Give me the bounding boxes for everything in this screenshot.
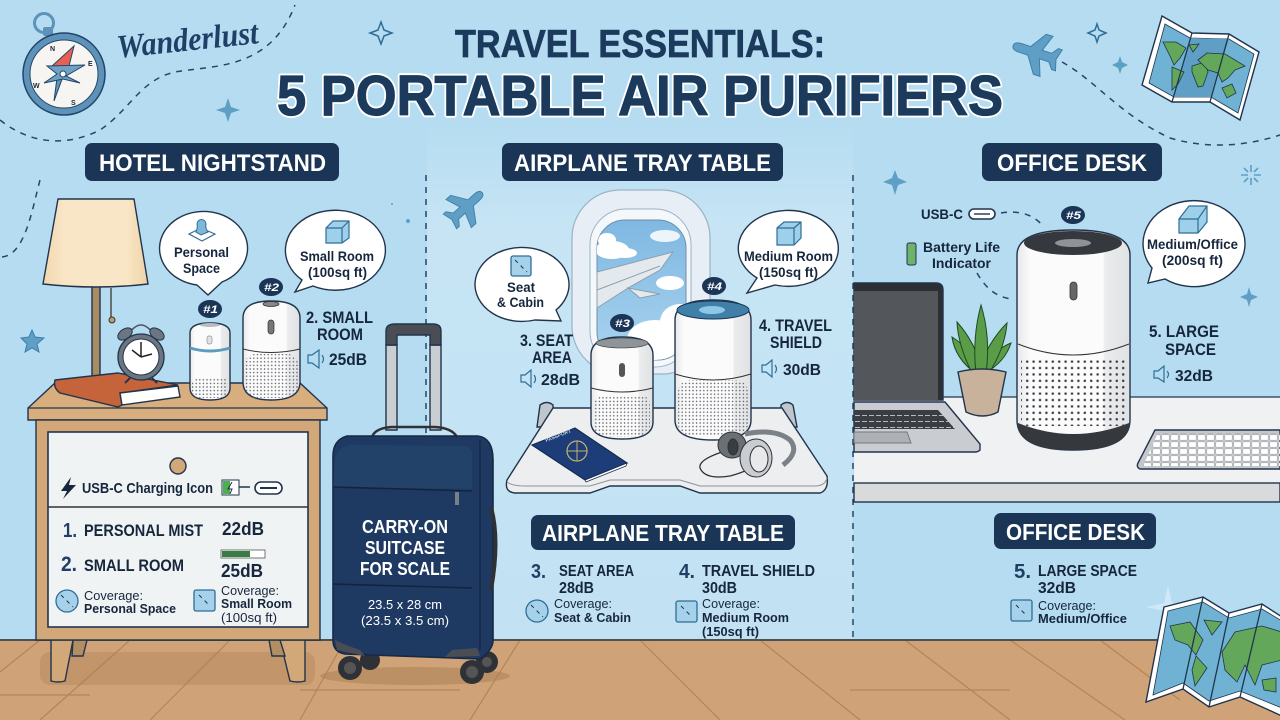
icon: compass: S: [71, 100, 76, 107]
label: 5. large space: 32dB: [1175, 368, 1213, 385]
callout: small room: Small Room: [300, 248, 374, 264]
callout: medium room: (150sq ft): [759, 264, 818, 280]
legend row: usb-c charging: USB-C Charging Icon: [82, 480, 213, 497]
icon: folded map bottom right: [1146, 597, 1280, 716]
legend: coverage small room: Coverage:: [221, 583, 279, 598]
label: battery life feature: Indicator: [932, 255, 992, 271]
legend row: usb-c charging: [61, 477, 282, 499]
nightstand body: [36, 420, 320, 640]
legend row: small room: 2.: [61, 553, 77, 576]
label: 3. seat area: AREA: [532, 348, 572, 367]
illustration: carry-on suitcase: 23.5 x 28 cm: [368, 597, 442, 612]
title: 5 PORTABLE AIR PURIFIERS: [277, 64, 1003, 128]
callout: seat and cabin: [475, 247, 569, 321]
title: [277, 23, 1003, 128]
callout: seat and cabin: Seat: [507, 279, 535, 295]
section dividers: [426, 175, 853, 640]
heading: office desk: OFFICE DESK: [997, 150, 1148, 177]
icon: airplane center: [437, 179, 495, 235]
badge #3: [610, 314, 634, 332]
panel: airplane backdrop: [427, 120, 853, 640]
badge #3: #3: [615, 318, 630, 330]
label: 5. large space: SPACE: [1165, 340, 1216, 359]
callout: seat and cabin: & Cabin: [497, 294, 544, 310]
callout: small room: (100sq ft): [308, 264, 367, 280]
badge #2: [259, 278, 283, 296]
nightstand top: [28, 383, 327, 420]
purifier #5: [1017, 230, 1130, 450]
legend: coverage small room: [194, 583, 292, 625]
legend row: personal mist: 22dB: [222, 519, 264, 539]
illustration: potted plant: [952, 305, 1011, 416]
purifier #3: [591, 337, 653, 439]
illustration: table lamp: [43, 199, 148, 385]
icon: compass: [23, 14, 105, 115]
legend: large space: Medium/Office: [1038, 611, 1127, 626]
legend: seat area: 3.: [531, 561, 546, 583]
label: 5. large space: [1149, 322, 1219, 385]
title: TRAVEL ESSENTIALS:: [455, 23, 825, 66]
label: 3. seat area: [520, 331, 580, 389]
legend: travel shield: (150sq ft): [702, 624, 759, 639]
label: 3. seat area: 28dB: [541, 372, 580, 389]
label: usb-c feature: USB-C: [921, 206, 963, 222]
callout: personal space: Space: [183, 260, 220, 276]
label: 3. seat area: 3. SEAT: [520, 331, 574, 350]
legend: large space: [1011, 561, 1137, 626]
illustration: nightstand: [28, 383, 327, 682]
label: 4. travel shield: [759, 316, 832, 379]
legend: coverage personal space: [56, 588, 176, 616]
heading: office desk legend: OFFICE DESK: [1006, 519, 1145, 545]
legend row: small room: [61, 550, 265, 581]
heading: hotel nightstand: [85, 143, 339, 181]
heading: office desk legend: [994, 513, 1156, 549]
badge #5: #5: [1066, 210, 1082, 222]
legend row: personal mist: 1.: [63, 520, 77, 542]
legend: travel shield: 30dB: [702, 580, 737, 597]
label: 2. small room: [306, 308, 373, 369]
badge #4: [702, 277, 726, 295]
legend: travel shield: TRAVEL SHIELD: [702, 563, 815, 580]
legend: seat area: SEAT AREA: [559, 563, 634, 580]
legend: coverage small room: Small Room: [221, 596, 292, 611]
label: 2. small room: 25dB: [329, 350, 367, 369]
callout: personal space: [160, 211, 248, 295]
heading: hotel nightstand: HOTEL NIGHTSTAND: [99, 150, 326, 177]
legend: coverage small room: (100sq ft): [221, 610, 277, 625]
label: 4. travel shield: 4. TRAVEL: [759, 316, 832, 335]
title: 5 PORTABLE AIR PURIFIERS: [277, 64, 1003, 128]
legend: seat area: [526, 561, 634, 625]
legend: seat area: Coverage:: [554, 596, 612, 611]
callout: personal space: Personal: [174, 244, 229, 260]
illustration: passport: PASSPORT: [545, 429, 572, 444]
suitcase shell: [333, 436, 493, 659]
label: usb-c feature: [921, 206, 1043, 226]
icon: compass: E: [88, 61, 93, 68]
legend: travel shield: Coverage:: [702, 596, 760, 611]
legend: travel shield: 4.: [679, 561, 695, 583]
wooden floor: [0, 639, 1280, 720]
illustration: headphones: [700, 432, 794, 477]
dashed arc by nightstand: [2, 180, 40, 257]
illustration: alarm clock: [116, 325, 166, 383]
illustration: office desk: [854, 397, 1280, 502]
badge #5: [1061, 206, 1085, 224]
illustration: carry-on suitcase: [333, 324, 498, 684]
purifier #2: [243, 301, 300, 400]
legend: large space: Coverage:: [1038, 598, 1096, 613]
heading: airplane tray table: [502, 143, 783, 181]
label: battery life feature: [907, 239, 1012, 299]
legend: seat area: 28dB: [559, 580, 594, 597]
icon: compass: W: [33, 83, 40, 90]
heading: airplane tray table: AIRPLANE TRAY TABLE: [514, 150, 771, 177]
label: 4. travel shield: 30dB: [783, 362, 821, 379]
legend row: personal mist: PERSONAL MIST: [84, 521, 204, 540]
legend: large space: 32dB: [1038, 580, 1076, 597]
callout: medium room: [738, 210, 838, 293]
illustration: keyboard: [1137, 430, 1280, 469]
legend row: small room: SMALL ROOM: [84, 556, 184, 575]
badge #1: #1: [203, 304, 218, 316]
icon: folded map top right: [1142, 16, 1259, 120]
nightstand legs: [51, 640, 305, 682]
illustration: tray table: [506, 402, 827, 493]
label: 4. travel shield: SHIELD: [770, 333, 822, 352]
callout: medium office: [1143, 201, 1245, 287]
illustration: book: [55, 373, 180, 407]
illustration: carry-on suitcase: SUITCASE: [365, 538, 445, 558]
label: 2. small room: ROOM: [317, 325, 363, 344]
purifier #4: [675, 300, 751, 440]
illustration: carry-on suitcase: (23.5 x 3.5 cm): [361, 613, 449, 628]
badge #1: [198, 300, 222, 318]
suitcase wheels: [338, 650, 498, 684]
legend row: small room: 25dB: [221, 561, 263, 581]
icon: compass: N: [50, 46, 55, 53]
callout: medium room: Medium Room: [744, 248, 833, 264]
dashed flight path, left: [0, 5, 295, 141]
legend: coverage personal space: Coverage:: [84, 588, 143, 603]
legend: seat area: Seat & Cabin: [554, 610, 631, 625]
logo: Wanderlust: Wanderlust: [115, 15, 261, 66]
drawer front: [48, 432, 308, 627]
legend: large space: LARGE SPACE: [1038, 563, 1137, 580]
legend: coverage personal space: Personal Space: [84, 601, 176, 616]
legend row: personal mist: [63, 519, 264, 542]
label: 5. large space: 5. LARGE: [1149, 322, 1219, 341]
legend: large space: 5.: [1014, 561, 1031, 583]
badge #4: #4: [707, 281, 722, 293]
heading: airplane tray table legend: [531, 515, 795, 550]
illustration: carry-on suitcase: FOR SCALE: [360, 559, 450, 579]
label: battery life feature: Battery Life: [923, 239, 1000, 255]
purifier #1: [190, 323, 230, 400]
legend: travel shield: [676, 561, 815, 639]
label: 2. small room: 2. SMALL: [306, 308, 373, 327]
legend: travel shield: Medium Room: [702, 610, 789, 625]
badge #2: #2: [264, 282, 279, 294]
icon: airplane top right: [1007, 26, 1065, 80]
suitcase handle: [386, 345, 441, 430]
callout: small room: [285, 210, 385, 292]
illustration: laptop: [854, 283, 980, 452]
suitcase label: CARRY-ON: [362, 517, 448, 537]
callout: medium office: (200sq ft): [1162, 252, 1223, 268]
heading: airplane tray table legend: AIRPLANE TRAY TABLE: [542, 520, 784, 546]
heading: office desk: [982, 143, 1162, 181]
illustration: airplane window: [572, 190, 710, 374]
callout: medium office: Medium/Office: [1147, 236, 1238, 252]
drawer knob: [170, 458, 186, 474]
dashed flight path, right: [1062, 62, 1280, 145]
illustration: passport: [532, 428, 627, 482]
